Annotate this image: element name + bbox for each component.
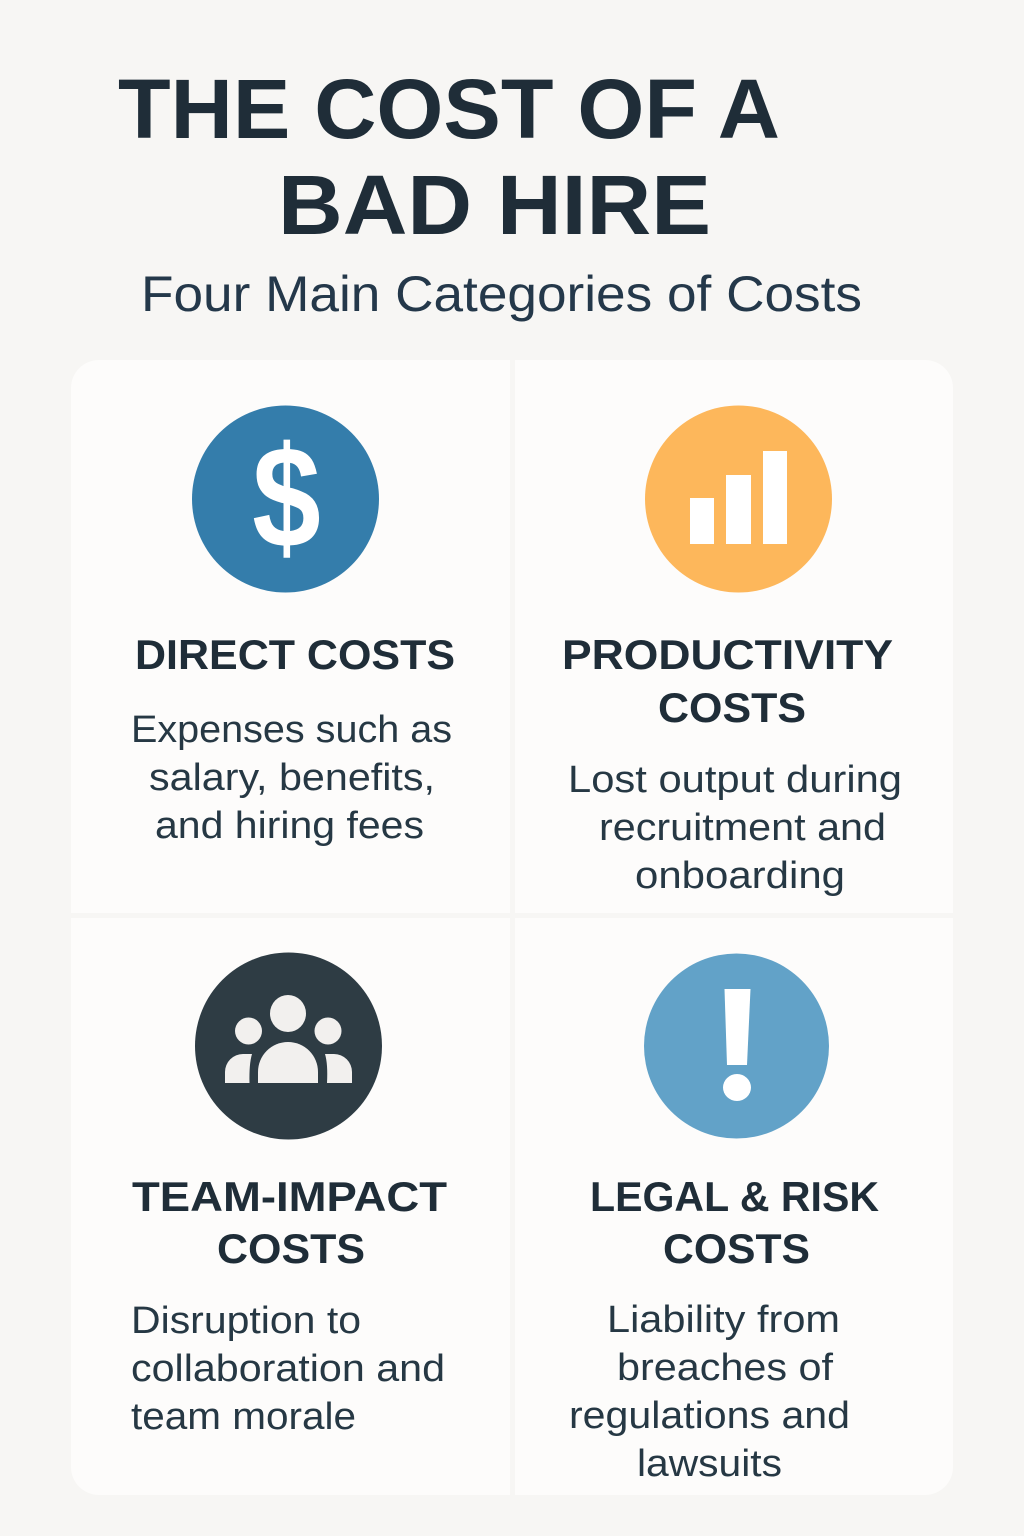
text: legal and risk costs description: breaches of bbox=[617, 1347, 833, 1389]
text: team-impact costs description: collaboration and bbox=[131, 1348, 445, 1390]
icon: exclamation mark bbox=[644, 954, 829, 1138]
heading: productivity costs bbox=[562, 631, 893, 731]
text: direct costs description bbox=[131, 709, 452, 847]
subtitle: Four Main Categories of Costs bbox=[141, 266, 862, 322]
title: BAD HIRE bbox=[278, 158, 711, 252]
text: team-impact costs description: team morale bbox=[131, 1396, 356, 1438]
icon: team bbox=[195, 952, 382, 1140]
title bbox=[118, 62, 780, 252]
panel: direct costs bbox=[71, 360, 510, 913]
heading: team-impact costs bbox=[132, 1173, 447, 1272]
heading: direct costs: DIRECT COSTS bbox=[135, 631, 455, 678]
heading: legal and risk costs bbox=[590, 1173, 879, 1272]
heading: productivity costs: PRODUCTIVITY bbox=[562, 631, 893, 678]
panel: productivity costs bbox=[515, 360, 953, 913]
icon: dollar sign bbox=[192, 406, 379, 592]
text: legal and risk costs description: Liability from bbox=[607, 1299, 840, 1341]
heading: productivity costs: COSTS bbox=[658, 684, 806, 731]
text: productivity costs description: recruitment and bbox=[599, 807, 886, 849]
text: legal and risk costs description: lawsuits bbox=[637, 1443, 782, 1485]
icon: dollar sign: $ bbox=[252, 417, 321, 578]
text: productivity costs description: Lost output during bbox=[568, 759, 902, 801]
text: direct costs description: salary, benefits, bbox=[149, 757, 435, 799]
text: productivity costs description bbox=[568, 759, 902, 897]
heading: legal and risk costs: COSTS bbox=[663, 1225, 810, 1272]
panel: team-impact costs bbox=[71, 918, 510, 1495]
text: direct costs description: and hiring fees bbox=[155, 805, 424, 847]
heading: team-impact costs: TEAM-IMPACT bbox=[132, 1173, 447, 1220]
text: direct costs description: Expenses such as bbox=[131, 709, 452, 751]
text: team-impact costs description: Disruption to bbox=[131, 1300, 361, 1342]
heading: team-impact costs: COSTS bbox=[217, 1225, 365, 1272]
heading: legal and risk costs: LEGAL & RISK bbox=[590, 1173, 879, 1220]
title: THE COST OF A bbox=[118, 62, 780, 156]
text: team-impact costs description bbox=[131, 1300, 445, 1438]
text: legal and risk costs description: regulations and bbox=[569, 1395, 850, 1437]
text: productivity costs description: onboarding bbox=[635, 855, 845, 897]
text: legal and risk costs description bbox=[569, 1299, 850, 1485]
icon: bar chart bbox=[645, 406, 832, 592]
panel: legal and risk costs bbox=[515, 918, 953, 1495]
